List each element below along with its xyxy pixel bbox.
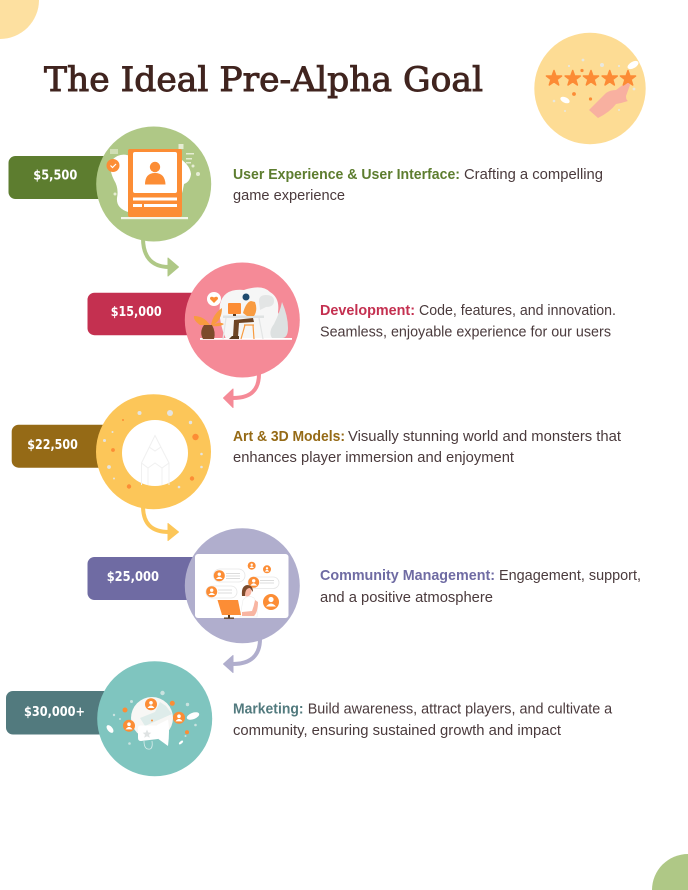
icon: community chat screen in purple circle: [185, 528, 300, 643]
amount pill: $5,500: $5,500: [33, 168, 77, 184]
amount pill: $22,500: $22,500: [27, 438, 78, 453]
row: art and 3D models: [12, 394, 622, 540]
amount pill: $22,500: [12, 425, 122, 468]
amount pill: $15,000: [88, 293, 208, 335]
description: community management: Community Management:: [320, 567, 495, 584]
title: The Ideal Pre-Alpha Goal: [44, 60, 483, 100]
description: marketing: [233, 700, 613, 739]
icon: globe and megaphone in teal circle: [97, 661, 212, 776]
description: marketing: Build awareness, attract players, and cultivate a: [308, 700, 613, 718]
description: marketing: community, ensuring sustained growth and impact: [233, 722, 562, 739]
amount pill: $30,000+: $30,000+: [24, 705, 85, 720]
description: user experience: game experience: [233, 187, 345, 204]
description: development: [320, 302, 616, 340]
description: development: Code, features, and innovation.: [419, 302, 616, 319]
decoration: bottom-right corner circle: [652, 854, 688, 890]
row: marketing: [6, 661, 613, 776]
icon: profile card in green circle: [96, 126, 211, 242]
row: user experience: [8, 126, 603, 276]
icon: five star rating badge: [534, 33, 646, 144]
decoration: top-left corner circle: [0, 0, 39, 39]
description: community management: Engagement, support,: [499, 567, 641, 584]
icon: pencil in orange ring: [96, 394, 211, 509]
description: marketing: Marketing:: [233, 700, 304, 718]
arrow: down to community: [143, 506, 178, 540]
arrow: down to art: [224, 374, 259, 408]
description: community management: [320, 567, 641, 606]
description: community management: and a positive atmosphere: [320, 589, 493, 606]
arrow: down to development: [143, 238, 178, 276]
description: art and 3D models: Art & 3D Models:: [233, 428, 345, 445]
icon: developer at desk in pink circle: [185, 262, 300, 378]
description: user experience: Crafting a compelling: [464, 166, 603, 183]
amount pill: $25,000: $25,000: [107, 570, 159, 585]
description: user experience: User Experience & User Interface:: [233, 166, 460, 183]
description: development: Development:: [320, 302, 415, 319]
description: art and 3D models: enhances player immersion and enjoyment: [233, 449, 515, 466]
description: development: Seamless, enjoyable experience for our users: [320, 324, 611, 340]
amount pill: $30,000+: [6, 691, 121, 734]
row: development: [88, 262, 616, 408]
amount pill: $25,000: [88, 557, 208, 600]
description: art and 3D models: Visually stunning world and monsters that: [348, 428, 622, 445]
description: art and 3D models: [233, 428, 622, 466]
amount pill: $15,000: $15,000: [111, 305, 162, 320]
row: community management: [88, 528, 641, 672]
arrow: down to marketing: [224, 639, 260, 672]
description: user experience: [233, 166, 603, 204]
amount pill: $5,500: [8, 156, 118, 199]
